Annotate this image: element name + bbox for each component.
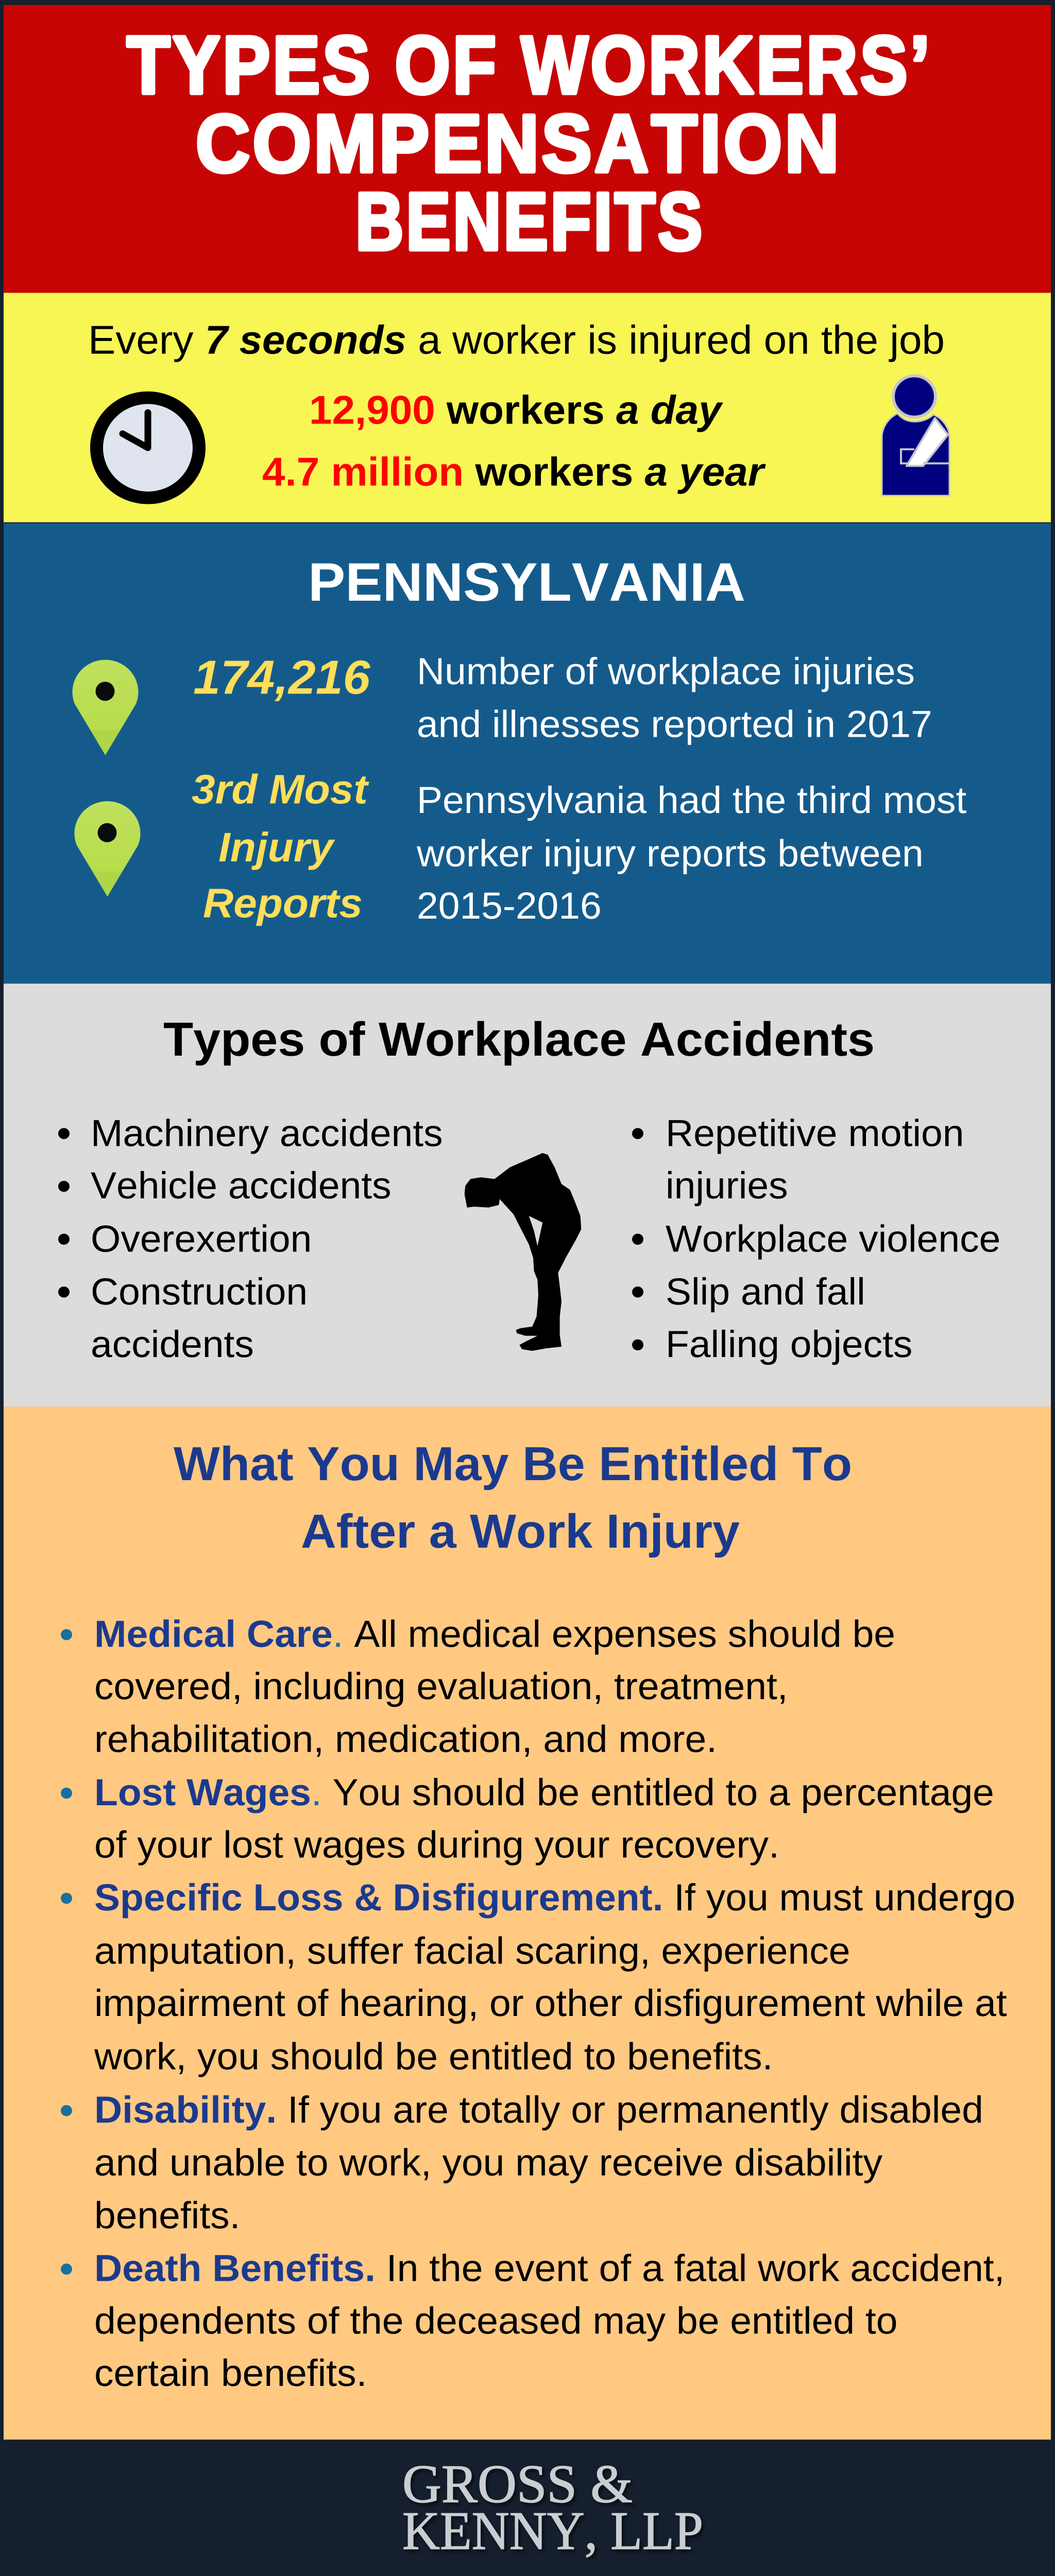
list item: death benefits <box>61 2247 1005 2394</box>
text: every 7 seconds: Every 7 seconds a worker is injured on the job <box>88 317 945 362</box>
list item: death benefits: dependents of the deceased may be entitled to <box>94 2299 897 2342</box>
list item: lost wages: of your lost wages during your recovery. <box>94 1823 779 1866</box>
list item: specific loss and disfigurement: work, you should be entitled to benefits. <box>94 2035 773 2077</box>
text: third most reports: worker injury reports between <box>416 832 924 874</box>
title: BENEFITS <box>355 176 705 267</box>
stat: 3rd most injury reports: 3rd Most <box>192 767 369 812</box>
list item: specific loss and disfigurement <box>61 1876 1015 2077</box>
list item: medical care: covered, including evaluation, treatment, <box>94 1665 788 1707</box>
stat: 3rd most injury reports: Injury <box>218 825 336 870</box>
text: injuries reported: and illnesses reported in 2017 <box>417 703 932 745</box>
stat: 3rd most injury reports <box>192 767 369 926</box>
list: accidents left: accidents <box>91 1323 254 1365</box>
icon: map pin 1 <box>72 660 138 755</box>
text: third most reports: 2015-2016 <box>417 885 602 927</box>
panel: title banner <box>4 5 1051 293</box>
panel: Pennsylvania <box>4 523 1051 984</box>
text: third most reports <box>416 779 966 927</box>
icon: map pin 2 <box>74 801 140 896</box>
list: accidents left <box>58 1112 443 1365</box>
list: accidents right: Slip and fall <box>666 1270 865 1313</box>
list item: medical care: Medical Care. All medical expenses should be <box>94 1613 895 1655</box>
panel: what you may be entitled to <box>4 1406 1051 2439</box>
list: accidents right: Workplace violence <box>666 1217 1000 1260</box>
heading: types of workplace accidents: Types of Workplace Accidents <box>163 1013 875 1066</box>
list item: specific loss and disfigurement: impairment of hearing, or other disfigurement while at <box>94 1982 1007 2024</box>
list item: disability: Disability. If you are totally or permanently disabled <box>94 2089 983 2131</box>
list item: disability <box>61 2089 983 2236</box>
list item: death benefits: certain benefits. <box>94 2351 367 2394</box>
list: accidents right: Repetitive motion <box>666 1112 964 1154</box>
stat: workers a day: 12,900 workers a day <box>309 387 723 432</box>
list: accidents right: Falling objects <box>666 1323 912 1365</box>
icon: injured worker with sling <box>882 376 949 496</box>
list item: death benefits: Death Benefits. In the event of a fatal work accident, <box>94 2247 1005 2289</box>
icon: bent over person silhouette <box>465 1153 581 1351</box>
list: accidents left: Overexertion <box>91 1217 312 1260</box>
logo: Gross & Kenny, LLP: KENNY, LLP <box>402 2501 703 2561</box>
list: accidents right <box>632 1112 1000 1365</box>
icon: clock <box>97 398 199 498</box>
text: injuries reported <box>417 650 932 745</box>
list: accidents right: injuries <box>666 1164 788 1207</box>
list item: medical care: rehabilitation, medication, and more. <box>94 1718 717 1760</box>
panel: injury frequency <box>4 293 1051 522</box>
heading: Pennsylvania: PENNSYLVANIA <box>308 551 745 612</box>
panel: footer <box>0 2439 1055 2576</box>
heading: entitled to: After a Work Injury <box>301 1505 740 1558</box>
list item: disability: and unable to work, you may receive disability <box>94 2141 882 2183</box>
stat: workers a year: 4.7 million workers a year <box>262 449 766 494</box>
list item: medical care <box>61 1613 895 1760</box>
list item: lost wages <box>61 1771 994 1866</box>
list item: specific loss and disfigurement: amputation, suffer facial scaring, experience <box>94 1929 850 1972</box>
title: TYPES OF WORKERS’ <box>127 20 932 111</box>
logo: Gross & Kenny, LLP: GROSS & <box>402 2454 633 2514</box>
title <box>127 20 932 267</box>
heading: entitled to <box>174 1437 852 1558</box>
list: accidents left: Construction <box>91 1270 308 1313</box>
logo: Gross & Kenny, LLP <box>402 2454 703 2561</box>
list: accidents left: Vehicle accidents <box>91 1164 392 1207</box>
stat: 3rd most injury reports: Reports <box>203 880 363 926</box>
list item: lost wages: Lost Wages. You should be entitled to a percentage <box>94 1771 994 1814</box>
list item: disability: benefits. <box>94 2194 241 2236</box>
list item: specific loss and disfigurement: Specific Loss & Disfigurement. If you must undergo <box>94 1876 1015 1919</box>
stat: 174,216: 174,216 <box>193 651 371 704</box>
list: accidents left: Machinery accidents <box>91 1112 443 1154</box>
panel: types of workplace accidents <box>4 984 1051 1406</box>
text: injuries reported: Number of workplace injuries <box>417 650 915 692</box>
text: third most reports: Pennsylvania had the third most <box>417 779 966 821</box>
title: COMPENSATION <box>196 98 842 189</box>
heading: entitled to: What You May Be Entitled To <box>174 1437 852 1491</box>
